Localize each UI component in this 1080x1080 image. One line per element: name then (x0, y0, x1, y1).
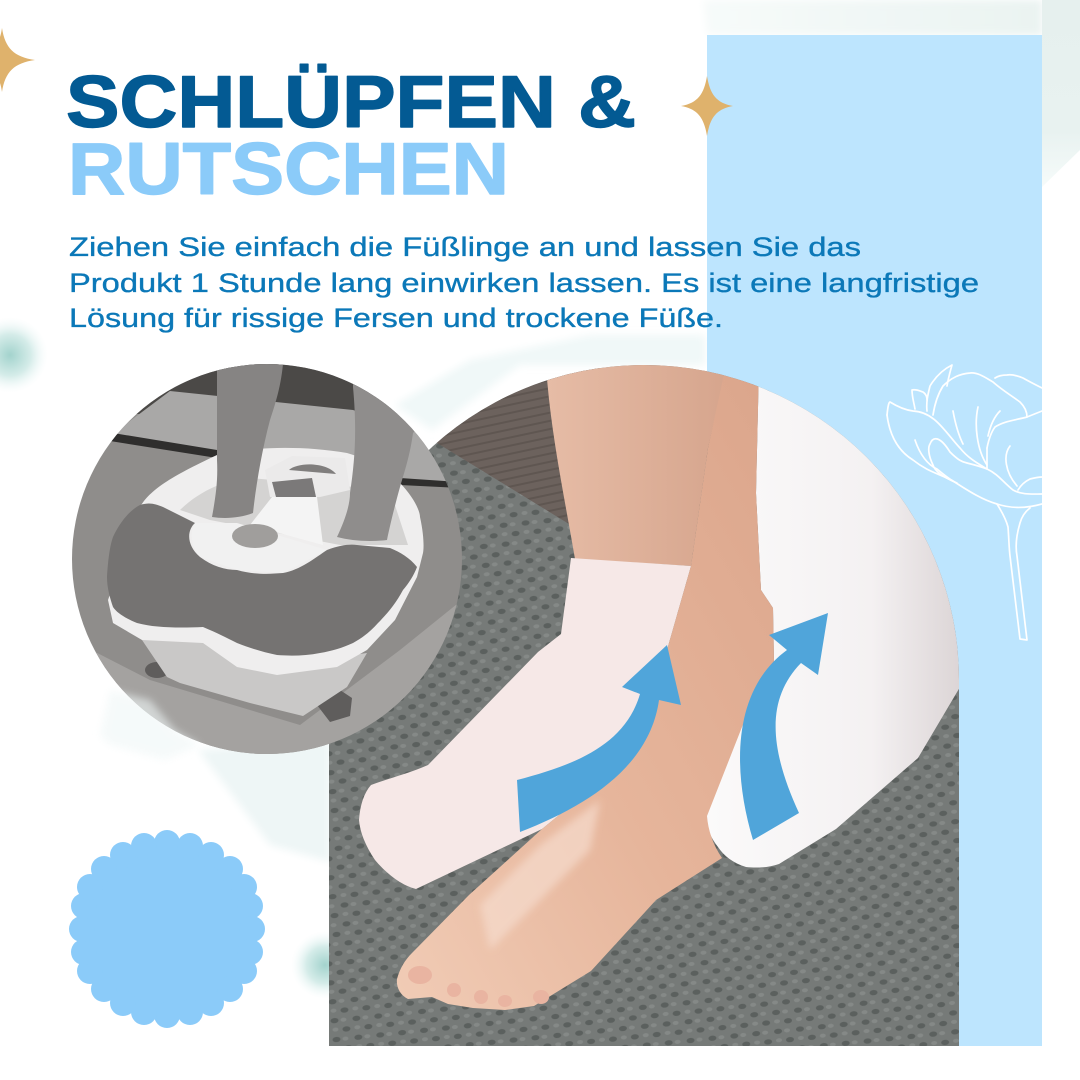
massager (272, 478, 316, 497)
white control panel (226, 523, 244, 526)
icon: flower line art (887, 365, 1042, 640)
right leg (337, 384, 414, 541)
body text: Lösung für rissige Fersen und trockene Füße. (69, 303, 723, 333)
wall (136, 364, 398, 414)
basin rim and white band (108, 448, 424, 675)
photo: foot with socks (329, 365, 960, 1046)
body text: Produkt 1 Stunde lang einwirken lassen. Es ist eine langfristige (69, 268, 979, 298)
far panel (266, 480, 350, 497)
icon: gold sparkle left (0, 28, 35, 92)
baseboard (110, 391, 460, 484)
basin interior (180, 478, 408, 545)
floor shadow right (400, 478, 448, 488)
toes (408, 966, 549, 1007)
feet of basin (145, 662, 352, 722)
title: SCHLÜPFEN & (66, 62, 636, 143)
worn sock (359, 558, 691, 889)
brown floor (424, 365, 600, 524)
button (232, 524, 278, 548)
wet highlight on foot (480, 800, 600, 950)
icon: scalloped badge (69, 830, 265, 1028)
arrow: empty sock arrow (740, 613, 828, 840)
body text: Ziehen Sie einfach die Füßlinge an und lassen Sie das (69, 232, 861, 262)
panel: light blue background (707, 35, 1042, 1046)
watercolor over lower left of photo (100, 690, 200, 760)
lower body (142, 635, 367, 716)
column (250, 497, 323, 545)
title: RUTSCHEN (68, 129, 509, 210)
front leg and foot (397, 365, 774, 1010)
arrow: worn sock arrow (517, 645, 681, 832)
white empty sock (706, 365, 960, 868)
floor (72, 364, 462, 754)
title (66, 62, 636, 210)
body text (69, 232, 979, 333)
dark lid (107, 504, 417, 656)
photo: grayscale foot spa (72, 364, 462, 754)
left leg (212, 364, 283, 518)
lighter floor bottom (96, 604, 456, 754)
massager top vent (289, 464, 336, 474)
mat (329, 365, 959, 1046)
icon: gold sparkle right (681, 76, 733, 136)
floor shadow left (110, 433, 217, 458)
back calf (546, 365, 727, 566)
